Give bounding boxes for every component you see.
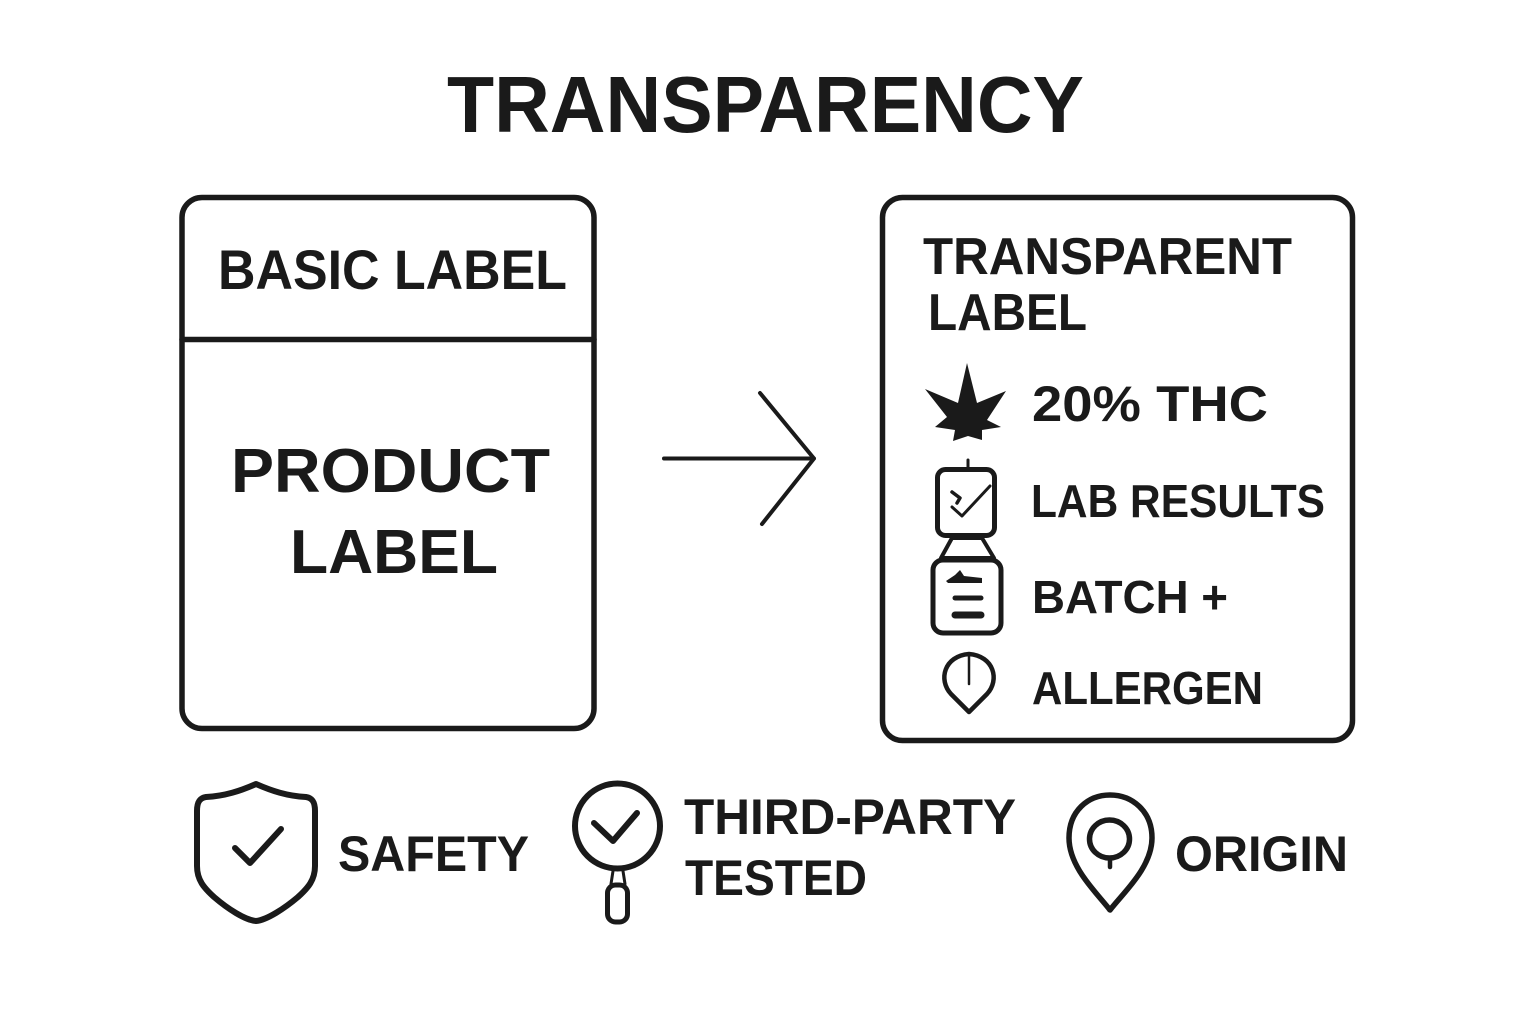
icon: batch bottle: [933, 538, 1001, 633]
text: third-party tested: TESTED: [685, 850, 867, 906]
title: TRANSPARENCY: [447, 60, 1084, 149]
text: third-party tested: THIRD-PARTY: [684, 789, 1016, 845]
panel: basic label: [182, 198, 594, 728]
text: safety: SAFETY: [338, 826, 529, 882]
icon: location pin: [1069, 795, 1152, 910]
text: lab results: LAB RESULTS: [1031, 475, 1325, 527]
text: product label: [231, 437, 550, 587]
text: product label: PRODUCT: [231, 437, 550, 506]
icon: lab results clipboard: [938, 460, 994, 536]
badge: safety: [197, 784, 529, 921]
icon: magnifier with check: [575, 784, 660, 922]
text: allergen: ALLERGEN: [1032, 662, 1263, 714]
text: 20% THC: 20% THC: [1032, 376, 1268, 432]
panel outline: [882, 198, 1352, 740]
heading: transparent label: TRANSPARENT: [923, 228, 1292, 286]
text: origin: ORIGIN: [1175, 826, 1348, 882]
panel outline: [182, 198, 594, 728]
header divider: [182, 337, 594, 342]
text: third-party tested: [684, 789, 1016, 906]
heading: basic label: BASIC LABEL: [218, 238, 567, 301]
badge: third-party tested: [575, 784, 1016, 922]
heading: transparent label: LABEL: [928, 284, 1087, 342]
icon: shield: [197, 784, 315, 921]
heading: transparent label: [923, 228, 1292, 342]
icon: cannabis leaf: [925, 363, 1006, 441]
panel: transparent label: [882, 198, 1352, 740]
text: product label: LABEL: [290, 518, 498, 587]
icon: allergen pin: [944, 654, 994, 712]
arrow: [664, 393, 814, 524]
badge: origin: [1069, 795, 1348, 910]
text: batch +: BATCH +: [1032, 571, 1228, 623]
